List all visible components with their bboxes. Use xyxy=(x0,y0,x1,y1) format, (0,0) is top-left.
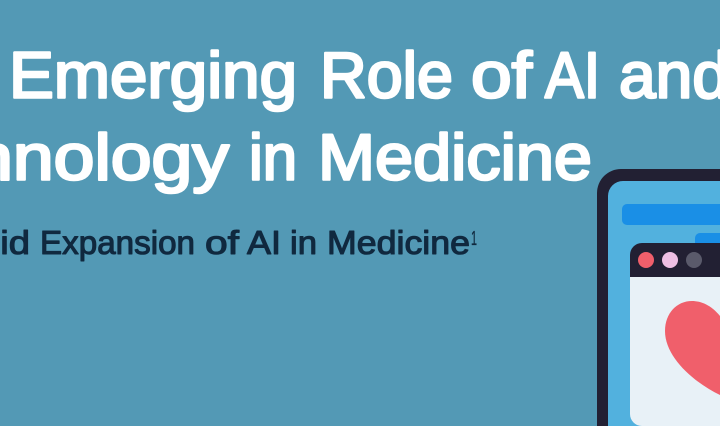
subtitle: in xyxy=(290,224,317,261)
app window body xyxy=(630,260,720,426)
subtitle: Expansion xyxy=(40,224,195,261)
icon: tablet with medical app window xyxy=(597,169,720,426)
subtitle: 1 xyxy=(471,228,477,250)
window dot pink xyxy=(662,252,678,268)
title xyxy=(0,38,720,194)
window dot red xyxy=(638,252,654,268)
second blue bar xyxy=(695,233,720,253)
subtitle xyxy=(0,224,477,261)
window dot grey xyxy=(686,252,702,268)
title: AI xyxy=(545,38,600,112)
title: Medicine xyxy=(318,120,592,194)
subtitle: of xyxy=(205,224,240,261)
tablet screen xyxy=(608,181,720,426)
title: of xyxy=(471,38,533,112)
blue bar xyxy=(622,204,720,225)
title: Role xyxy=(320,38,453,112)
subtitle: AI xyxy=(247,224,281,261)
subtitle: Medicine xyxy=(327,224,470,261)
icon: heart xyxy=(665,301,720,395)
title: in xyxy=(249,120,297,194)
title: Emerging xyxy=(9,38,297,112)
tablet body xyxy=(597,169,720,426)
app window header xyxy=(630,243,720,277)
